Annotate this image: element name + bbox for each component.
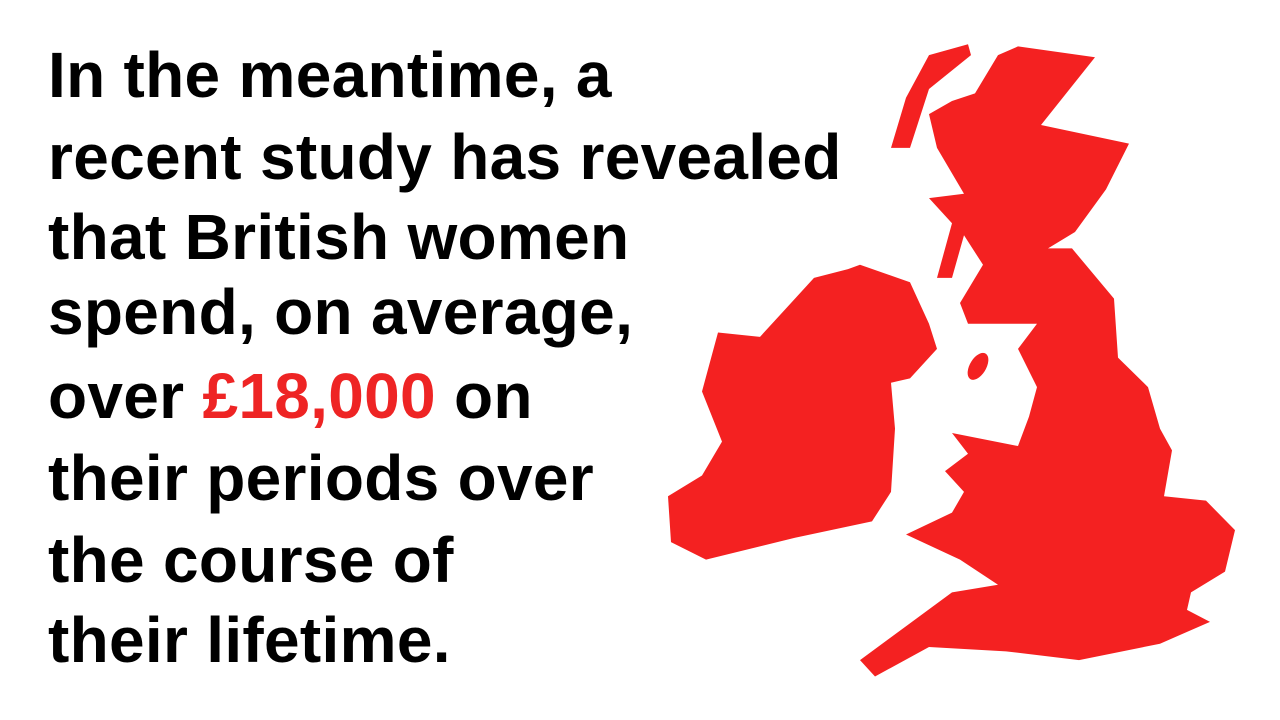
Ireland	[668, 265, 937, 560]
Outer Hebrides	[891, 44, 971, 148]
text block: headline	[48, 39, 842, 676]
text block: headline: spend, on average,	[48, 276, 633, 348]
Isle of Man	[963, 349, 993, 384]
text block: headline: In the meantime, a	[48, 39, 612, 111]
text block: headline: recent study has revealed	[48, 121, 842, 193]
text block: headline: over £18,000 on	[48, 360, 533, 432]
text block: headline: their lifetime.	[48, 604, 451, 676]
text block: headline: that British women	[48, 201, 629, 273]
text block: headline: the course of	[48, 524, 454, 596]
text block: headline: their periods over	[48, 442, 594, 514]
Great Britain	[860, 46, 1235, 676]
